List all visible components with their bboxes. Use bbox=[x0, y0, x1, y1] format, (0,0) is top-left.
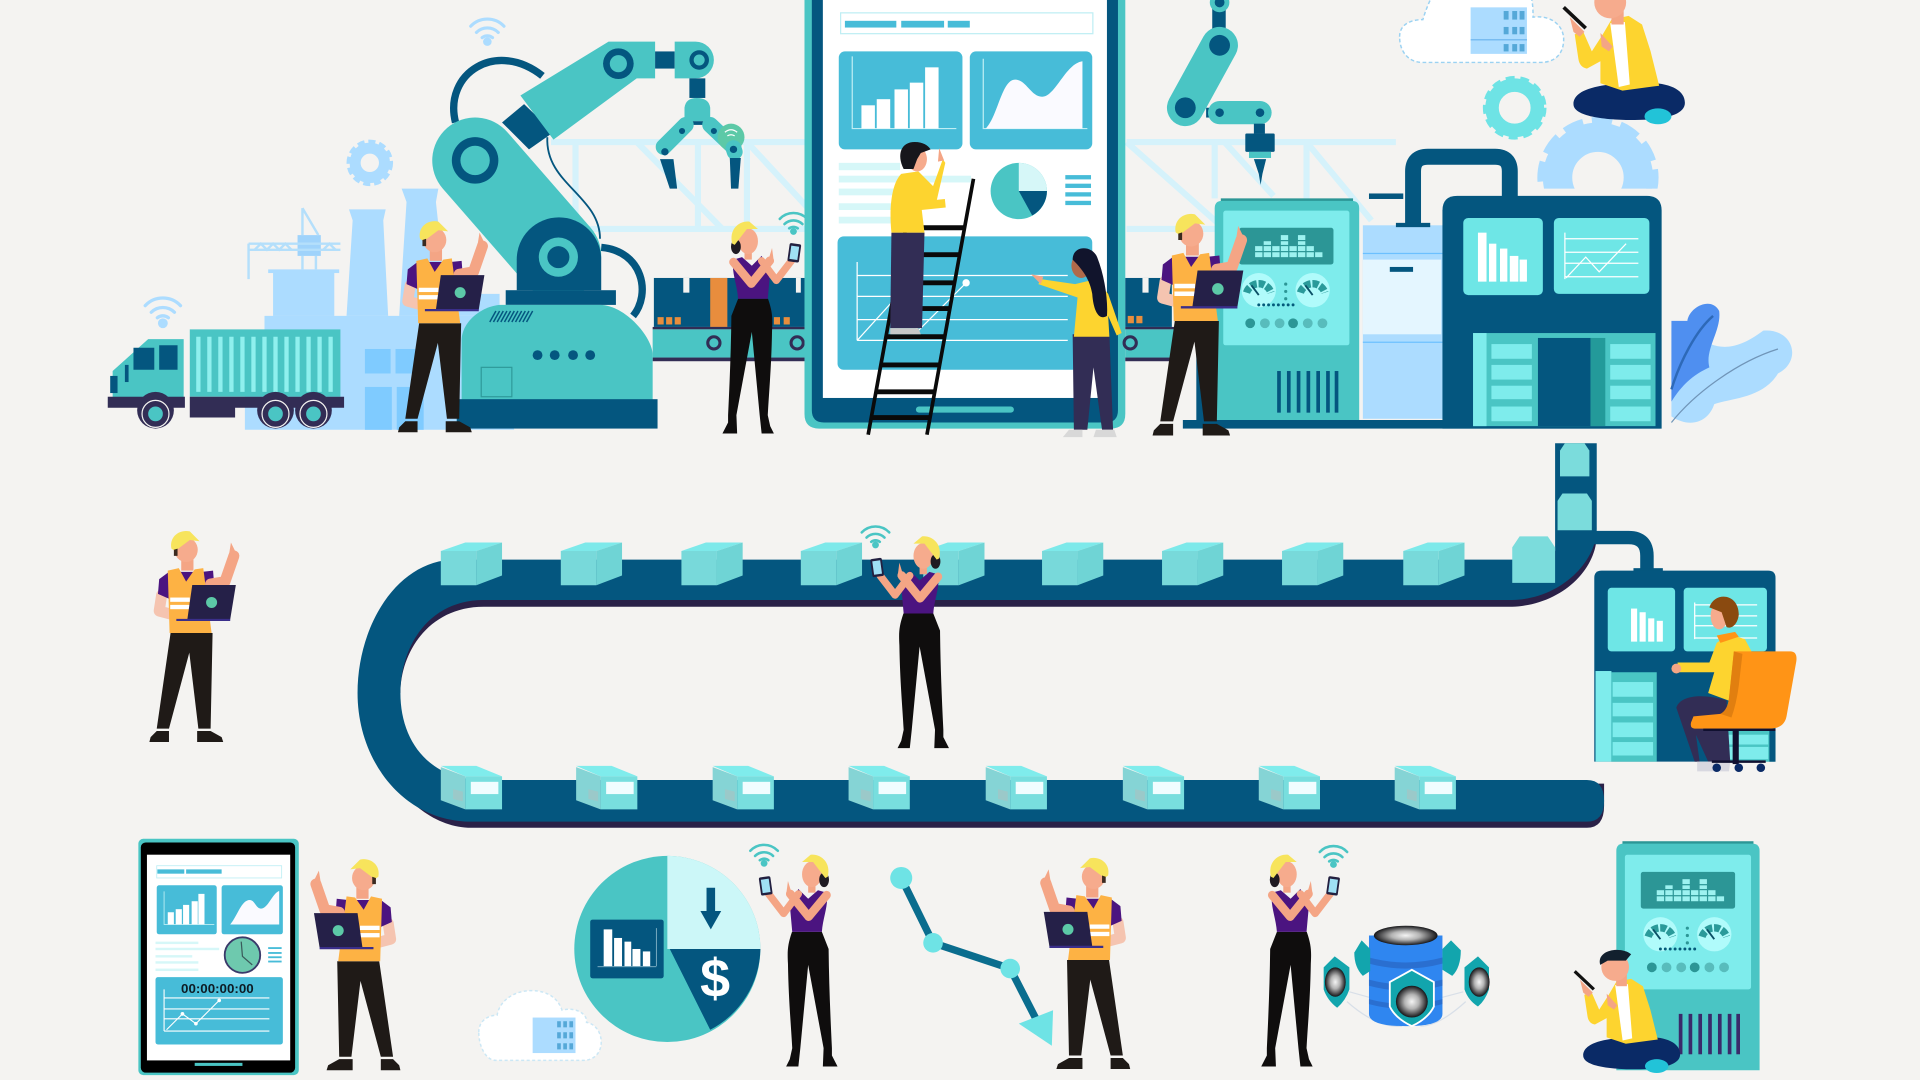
text lines bbox=[839, 163, 971, 223]
machine 1: control panel bbox=[1215, 198, 1359, 420]
gear: pale blue left bbox=[350, 143, 390, 183]
area chart panel bbox=[970, 51, 1092, 149]
woman: database bbox=[1261, 855, 1340, 1067]
machine 2: screens and drawers bbox=[1442, 196, 1662, 429]
worker: bottom left flipped bbox=[311, 859, 400, 1070]
route arrow bbox=[890, 867, 1053, 1046]
pipe to desk machine bbox=[1592, 538, 1647, 572]
big tablet dashboard bbox=[804, 0, 1125, 429]
wifi: top robot bbox=[471, 19, 504, 46]
seated man: top bbox=[1564, 0, 1685, 124]
navy machine base bbox=[1183, 278, 1660, 429]
worker: top left with laptop bbox=[398, 221, 487, 432]
worker on ladder bbox=[890, 142, 945, 334]
truss frame behind top row bbox=[551, 142, 1396, 229]
conveyor: right of tablet bbox=[1124, 278, 1187, 361]
factory silhouette bbox=[245, 189, 514, 430]
worker: bottom centre flipped bbox=[1041, 858, 1130, 1069]
woman pointing at dashboard bbox=[1031, 248, 1122, 437]
wifi: conveyor woman bbox=[862, 526, 889, 548]
big pie chart with dollar bbox=[574, 856, 760, 1042]
half gear bbox=[1537, 117, 1658, 189]
leaves bbox=[1671, 304, 1792, 423]
dollar sign: $ bbox=[700, 949, 730, 1009]
wifi: pie woman bbox=[750, 845, 778, 867]
robot arm bbox=[452, 42, 744, 429]
crane bbox=[249, 208, 340, 279]
conveyor: left of tablet bbox=[653, 278, 808, 361]
line chart panel bbox=[838, 236, 1092, 370]
wifi: truck bbox=[145, 298, 180, 328]
machine 3: bottom right bbox=[1616, 841, 1760, 1070]
boxes: top belt bbox=[441, 542, 1464, 585]
cabinet bbox=[1363, 225, 1444, 419]
database with shields bbox=[1324, 926, 1490, 1026]
cloud: top bbox=[1400, 0, 1564, 62]
seated operator and chair bbox=[1671, 597, 1797, 772]
woman: pie chart bbox=[759, 855, 838, 1067]
pipe bbox=[1369, 157, 1510, 227]
small tablet with clock and timer bbox=[138, 839, 299, 1075]
truck bbox=[108, 329, 344, 429]
woman on conveyor bbox=[870, 536, 949, 748]
boxes: bottom belt bbox=[441, 766, 1456, 809]
pie chart bbox=[991, 163, 1047, 219]
boxes: vertical belt bbox=[1512, 443, 1592, 583]
overhead drill arm bbox=[1175, 0, 1275, 185]
desk machine bbox=[1594, 568, 1776, 762]
bar chart panel bbox=[839, 51, 962, 149]
worker: conveyor left bbox=[149, 531, 239, 742]
ladder bbox=[868, 179, 973, 435]
conveyor belt bbox=[358, 443, 1604, 822]
conveyor belt shadow bbox=[367, 533, 1604, 828]
cloud: bottom bbox=[479, 991, 601, 1060]
seated man: bottom bbox=[1575, 950, 1680, 1073]
timer text: 00:00:00:00 bbox=[181, 981, 254, 996]
gear: teal right bbox=[1486, 79, 1543, 137]
worker: top right with laptop bbox=[1153, 214, 1246, 435]
wifi: database woman bbox=[1320, 846, 1347, 868]
wifi: top conveyor woman bbox=[780, 213, 807, 235]
tablet header bar bbox=[841, 13, 1093, 34]
clock bbox=[225, 937, 260, 973]
woman: top conveyor bbox=[722, 222, 801, 433]
